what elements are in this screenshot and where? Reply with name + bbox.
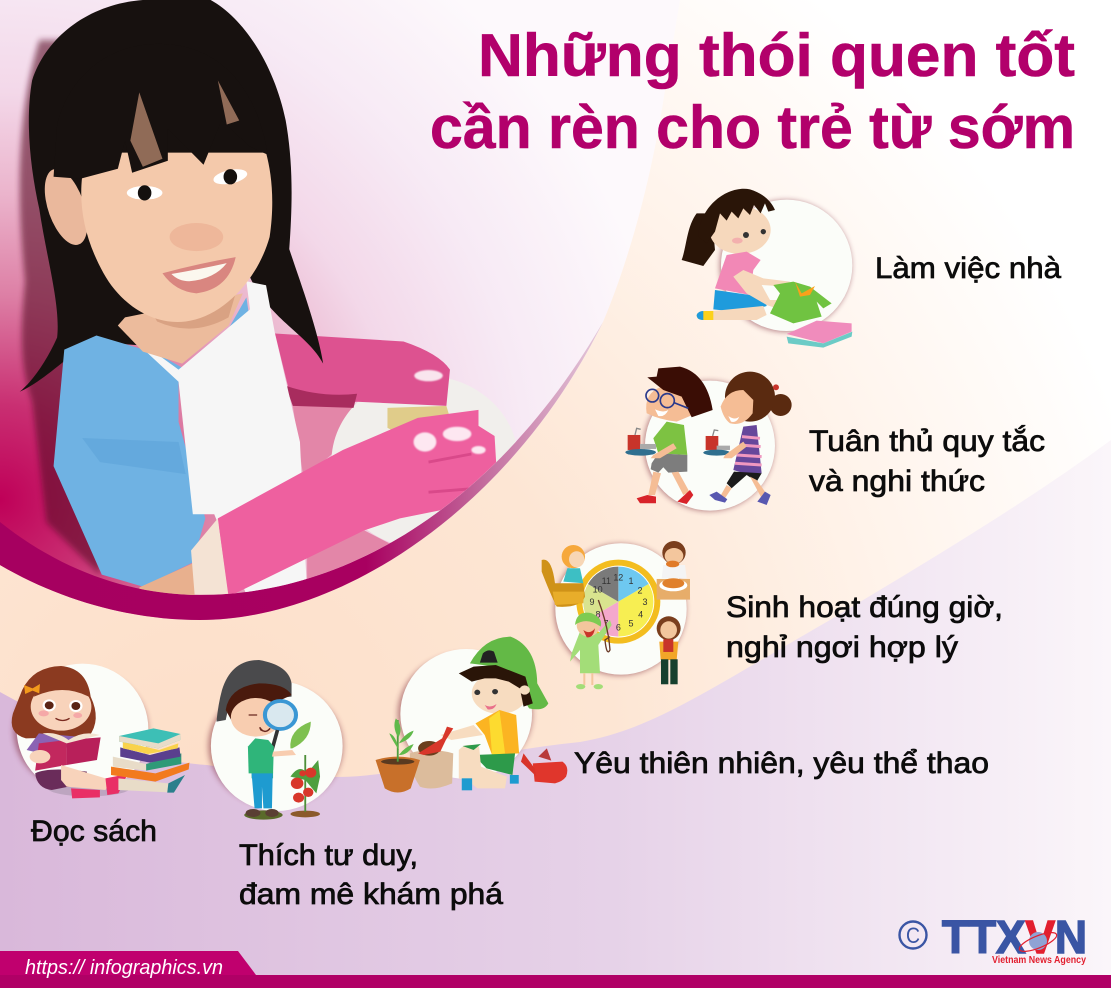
forearm xyxy=(139,564,195,595)
label: thinking and exploring: đam mê khám phá xyxy=(239,878,503,911)
label: daily routine: Sinh hoạt đúng giờ, xyxy=(726,591,1003,624)
shadow behind girl xyxy=(20,40,107,575)
title: cần rèn cho trẻ từ sớm xyxy=(430,94,1075,161)
title: Những thói quen tốt xyxy=(478,22,1075,89)
label: thinking and exploring xyxy=(239,839,503,911)
icon: daily schedule clock: 9 xyxy=(589,597,594,607)
icon: daily schedule clock: 1 xyxy=(628,576,633,586)
background between the arms xyxy=(292,406,390,579)
icon: boy with magnifying glass xyxy=(208,660,343,820)
footer bar xyxy=(0,975,1111,988)
ear xyxy=(44,169,87,245)
icon: girl folding clothes xyxy=(682,189,852,348)
plate xyxy=(331,376,519,548)
hair xyxy=(20,0,323,392)
logo: TTXVN: TTXVN xyxy=(942,911,1087,963)
background: lilac lower wave xyxy=(0,440,1111,988)
label: daily routine: nghỉ ngơi hợp lý xyxy=(726,631,958,664)
label: thinking and exploring: Thích tư duy, xyxy=(239,839,418,872)
icon: girl reading xyxy=(12,664,189,798)
nose xyxy=(170,223,223,251)
photo: girl washing a plate xyxy=(20,0,519,599)
label: daily routine xyxy=(726,591,1003,664)
icon: daily schedule clock xyxy=(542,541,690,689)
background: photo circle xyxy=(0,0,680,620)
footer url tab: https:// infographics.vn xyxy=(25,957,223,979)
icon: daily schedule clock: 4 xyxy=(638,609,643,619)
icon: daily schedule clock: 6 xyxy=(616,623,621,633)
shirt xyxy=(54,297,250,587)
icon: boy gardening xyxy=(376,637,567,792)
label: following rules: và nghi thức xyxy=(809,465,985,498)
icon: daily schedule clock: 11 xyxy=(602,576,611,586)
icon: daily schedule clock: 12 xyxy=(613,573,623,583)
icon: daily schedule clock: 7 xyxy=(603,618,608,628)
group: illustrations right column xyxy=(542,189,852,689)
label: reading: Đọc sách xyxy=(31,815,157,848)
sponge xyxy=(388,406,449,430)
books stack xyxy=(111,728,189,793)
mouth xyxy=(162,257,236,293)
icon: daily schedule clock: 3 xyxy=(642,597,647,607)
logo: TTXVN: Vietnam News Agency xyxy=(992,955,1086,966)
label: nature and sports: Yêu thiên nhiên, yêu thể thao xyxy=(574,747,989,780)
apron xyxy=(118,281,307,595)
watering can xyxy=(533,762,567,783)
logo: TTXVN: C xyxy=(906,923,920,948)
label: housework: Làm việc nhà xyxy=(875,252,1061,285)
face xyxy=(81,153,272,322)
group: illustrations bottom row xyxy=(12,637,567,820)
icon: daily schedule clock: 8 xyxy=(595,609,600,619)
footer url tab xyxy=(0,951,256,979)
eyes xyxy=(127,186,162,200)
icon: daily schedule clock: 2 xyxy=(637,585,642,595)
icon: daily schedule clock: 5 xyxy=(628,618,633,628)
bangs xyxy=(54,152,266,178)
neck xyxy=(118,293,243,364)
front glove xyxy=(218,410,496,597)
label: following rules xyxy=(809,425,1045,498)
label: following rules: Tuân thủ quy tắc xyxy=(809,425,1045,458)
soap foam xyxy=(414,370,486,454)
title xyxy=(430,22,1075,161)
icon: daily schedule clock: 10 xyxy=(593,584,603,594)
crescent band xyxy=(0,322,603,620)
back glove xyxy=(275,333,450,406)
icon: children carrying trays xyxy=(625,367,792,511)
